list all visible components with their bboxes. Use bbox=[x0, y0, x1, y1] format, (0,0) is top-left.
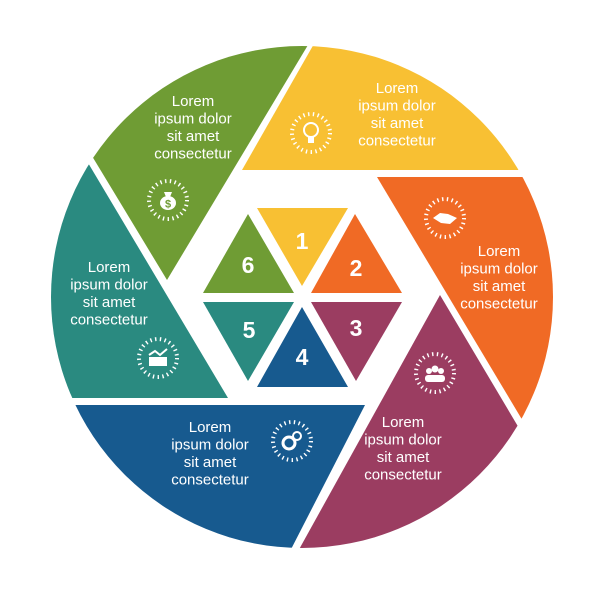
text: teal: ipsum dolor bbox=[70, 276, 148, 294]
triangle 5: 5 bbox=[243, 317, 256, 343]
triangle 1 bbox=[257, 208, 348, 286]
icon: team bbox=[416, 354, 454, 392]
text: yellow: sit amet bbox=[371, 115, 424, 132]
text: purple: sit amet bbox=[377, 449, 430, 466]
text: yellow: Lorem bbox=[376, 80, 418, 97]
segment: orange bbox=[377, 177, 553, 419]
icon: chart bbox=[139, 339, 177, 377]
text: orange: ipsum dolor bbox=[460, 260, 538, 278]
icon: lightbulb bbox=[292, 114, 330, 152]
text: orange: consectetur bbox=[460, 296, 538, 312]
text: blue: consectetur bbox=[171, 472, 249, 488]
triangle 5 bbox=[203, 302, 294, 381]
text: orange: Lorem bbox=[478, 243, 520, 260]
text: yellow: consectetur bbox=[358, 132, 436, 150]
text: teal: sit amet bbox=[83, 294, 136, 311]
segment: teal bbox=[51, 164, 228, 398]
text: orange: sit amet bbox=[473, 278, 526, 295]
icon: handshake bbox=[426, 199, 464, 237]
segment: yellow bbox=[242, 46, 518, 170]
text: blue: Lorem bbox=[189, 419, 231, 436]
triangle 3: 3 bbox=[350, 315, 362, 341]
segment: green bbox=[93, 46, 308, 280]
triangle 2 bbox=[311, 214, 402, 293]
triangle 3 bbox=[311, 302, 402, 381]
triangle 4 bbox=[257, 307, 348, 387]
text: blue: ipsum dolor bbox=[171, 436, 249, 454]
segment: blue bbox=[76, 405, 365, 548]
icon: gears bbox=[273, 422, 311, 460]
text: purple: consectetur bbox=[364, 466, 442, 484]
outer ring segments bbox=[51, 46, 553, 548]
text: green: consectetur bbox=[154, 146, 232, 162]
triangle 6 bbox=[203, 214, 294, 293]
text: yellow: ipsum dolor bbox=[358, 98, 436, 114]
text: blue: sit amet bbox=[184, 454, 237, 471]
icon: money bag bbox=[149, 181, 187, 219]
text: green: sit amet bbox=[167, 128, 220, 145]
triangle 4: 4 bbox=[296, 344, 309, 370]
triangle 2: 2 bbox=[350, 255, 362, 281]
icon: money bag: $ bbox=[165, 198, 171, 210]
triangle 1: 1 bbox=[296, 228, 309, 254]
text: green: ipsum dolor bbox=[154, 110, 232, 128]
triangle 6: 6 bbox=[242, 252, 254, 278]
text: green: Lorem bbox=[172, 93, 214, 110]
text: purple: Lorem bbox=[382, 414, 424, 431]
segment: purple bbox=[300, 295, 518, 548]
inner triangles bbox=[203, 208, 402, 387]
text: purple: ipsum dolor bbox=[364, 432, 442, 448]
text: teal: Lorem bbox=[88, 259, 130, 276]
text: teal: consectetur bbox=[70, 312, 148, 328]
